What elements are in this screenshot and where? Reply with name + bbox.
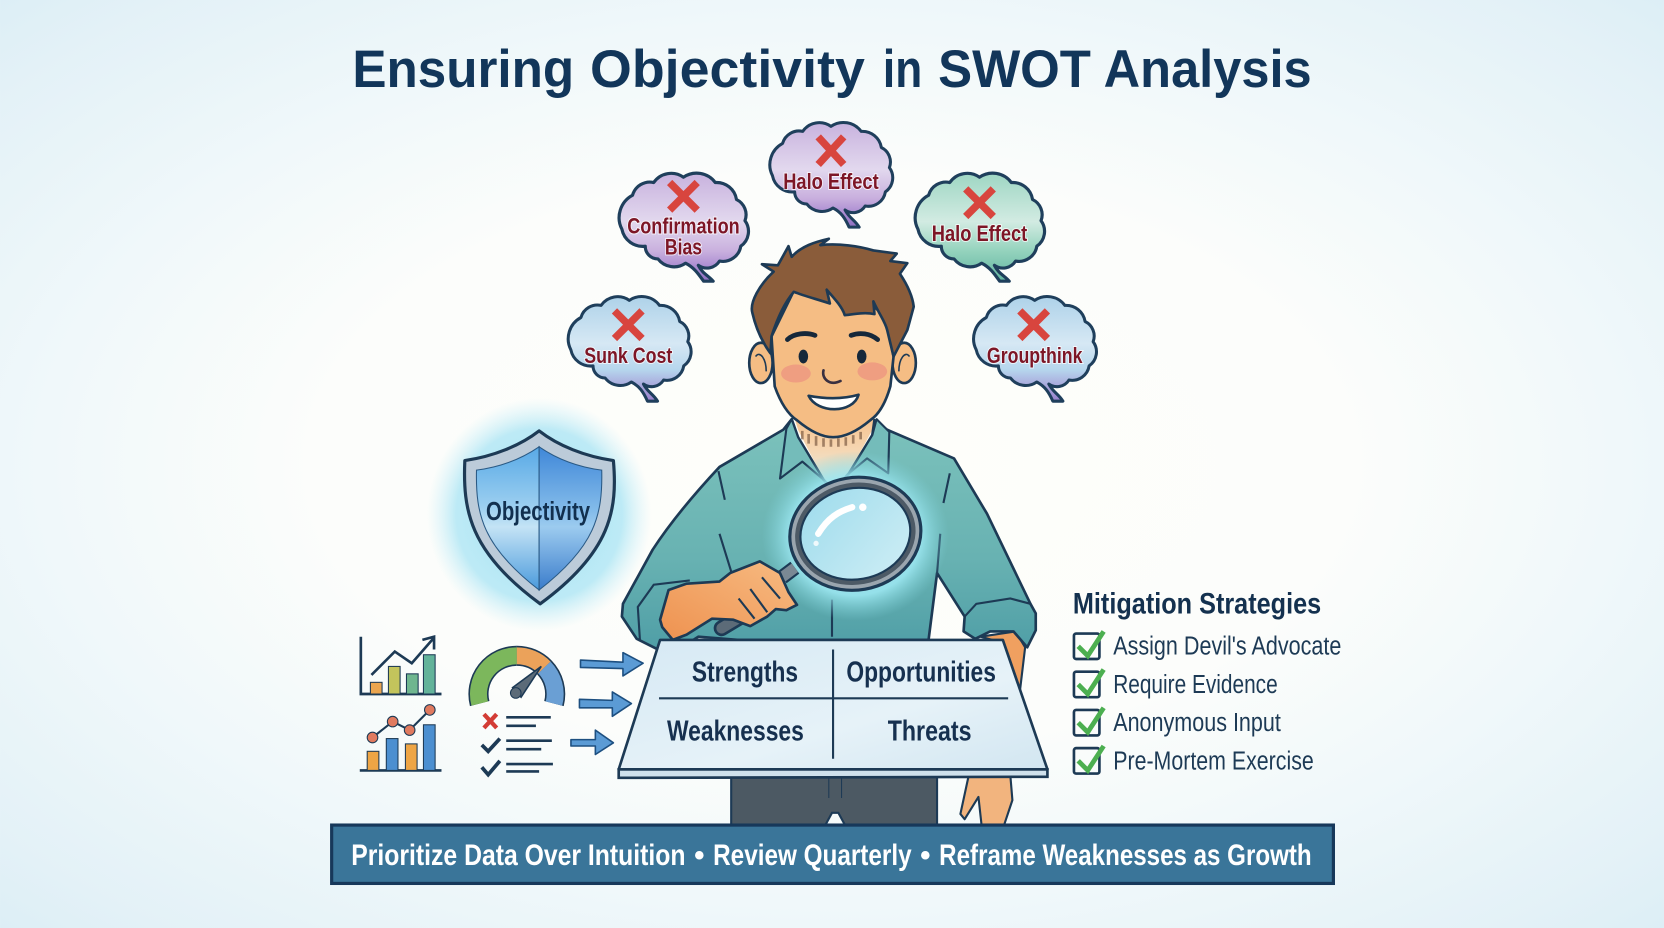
- item: assign devil's advocate: Assign Devil's Advocate: [1113, 633, 1341, 661]
- shirt folds and cuff lines: [638, 471, 1030, 640]
- bubble: halo effect right: Halo Effect: [932, 221, 1028, 246]
- collar: [780, 419, 889, 480]
- handle: [782, 568, 795, 577]
- frame: [781, 467, 930, 601]
- nose: [823, 370, 840, 383]
- bottom banner: Prioritize Data Over Intuition: [351, 839, 686, 872]
- objectivity shield: [427, 398, 652, 631]
- right hand: [960, 775, 1012, 826]
- finger lines: [739, 577, 780, 619]
- ears: [749, 343, 916, 383]
- title: Objectivity: [590, 40, 865, 99]
- SWOT board: [619, 640, 1047, 778]
- eyes and brows: [787, 334, 878, 363]
- item: pre-mortem exercise: [1074, 746, 1314, 775]
- mouth: [809, 395, 859, 409]
- shirt: [622, 419, 1036, 651]
- bottom banner: Review Quarterly: [713, 839, 912, 872]
- board edge: [619, 769, 1047, 778]
- line and bar chart top: [361, 637, 441, 694]
- bottom banner: •: [694, 839, 705, 872]
- bubble: sunk cost: [568, 297, 691, 401]
- shield glow: [427, 398, 652, 631]
- bubble: halo effect top: [770, 122, 893, 227]
- board surface: [619, 640, 1047, 769]
- item: pre-mortem exercise: Pre-Mortem Exercise: [1113, 747, 1314, 775]
- strengths: Strengths: [692, 656, 798, 688]
- cheeks: [781, 362, 887, 383]
- title: [352, 40, 1312, 99]
- stubble: [802, 431, 861, 447]
- arrows to SWOT board: [571, 653, 643, 754]
- face: [772, 284, 894, 437]
- bubble: confirmation bias: [619, 173, 748, 281]
- gauge: [478, 656, 555, 704]
- lens glow: [762, 451, 949, 621]
- data charts: [360, 637, 643, 775]
- neck: [792, 409, 877, 490]
- bubble: confirmation bias: Bias: [665, 235, 702, 260]
- title: Analysis: [1104, 40, 1312, 99]
- bottom banner: [332, 825, 1333, 883]
- bubble: halo effect top: Halo Effect: [783, 169, 879, 194]
- bubble: groupthink: Groupthink: [987, 343, 1083, 368]
- item: anonymous input: [1074, 708, 1281, 737]
- hair: [752, 239, 914, 357]
- legs: [731, 773, 937, 825]
- line and bar chart bottom: [360, 705, 441, 770]
- bubble: groupthink: [974, 297, 1096, 401]
- item: require evidence: Require Evidence: [1113, 671, 1278, 699]
- item: anonymous input: Anonymous Input: [1113, 709, 1281, 737]
- forearm right: [981, 631, 1025, 692]
- magnifying glass: [722, 451, 949, 628]
- bottom banner: •: [920, 839, 931, 872]
- title: Ensuring: [352, 40, 574, 99]
- mitigation strategies: [1073, 587, 1341, 775]
- title: SWOT: [938, 40, 1091, 99]
- bubble: sunk cost: Sunk Cost: [584, 343, 673, 368]
- opportunities: Opportunities: [846, 656, 996, 688]
- bottom banner: Reframe Weaknesses as Growth: [939, 839, 1312, 872]
- person: [622, 239, 1036, 826]
- bubble: halo effect right: [915, 173, 1045, 281]
- checklist: [482, 714, 553, 775]
- left hand: [660, 561, 797, 640]
- weaknesses: Weaknesses: [667, 716, 804, 748]
- heading: Mitigation Strategies: [1073, 587, 1321, 620]
- bubble: confirmation bias: Confirmation: [627, 213, 740, 238]
- title: in: [883, 40, 922, 99]
- threats: Threats: [888, 716, 972, 748]
- bias thought bubbles: [568, 122, 1096, 401]
- objectivity shield: Objectivity: [486, 498, 591, 526]
- item: require evidence: [1074, 670, 1278, 699]
- lens: [793, 479, 918, 588]
